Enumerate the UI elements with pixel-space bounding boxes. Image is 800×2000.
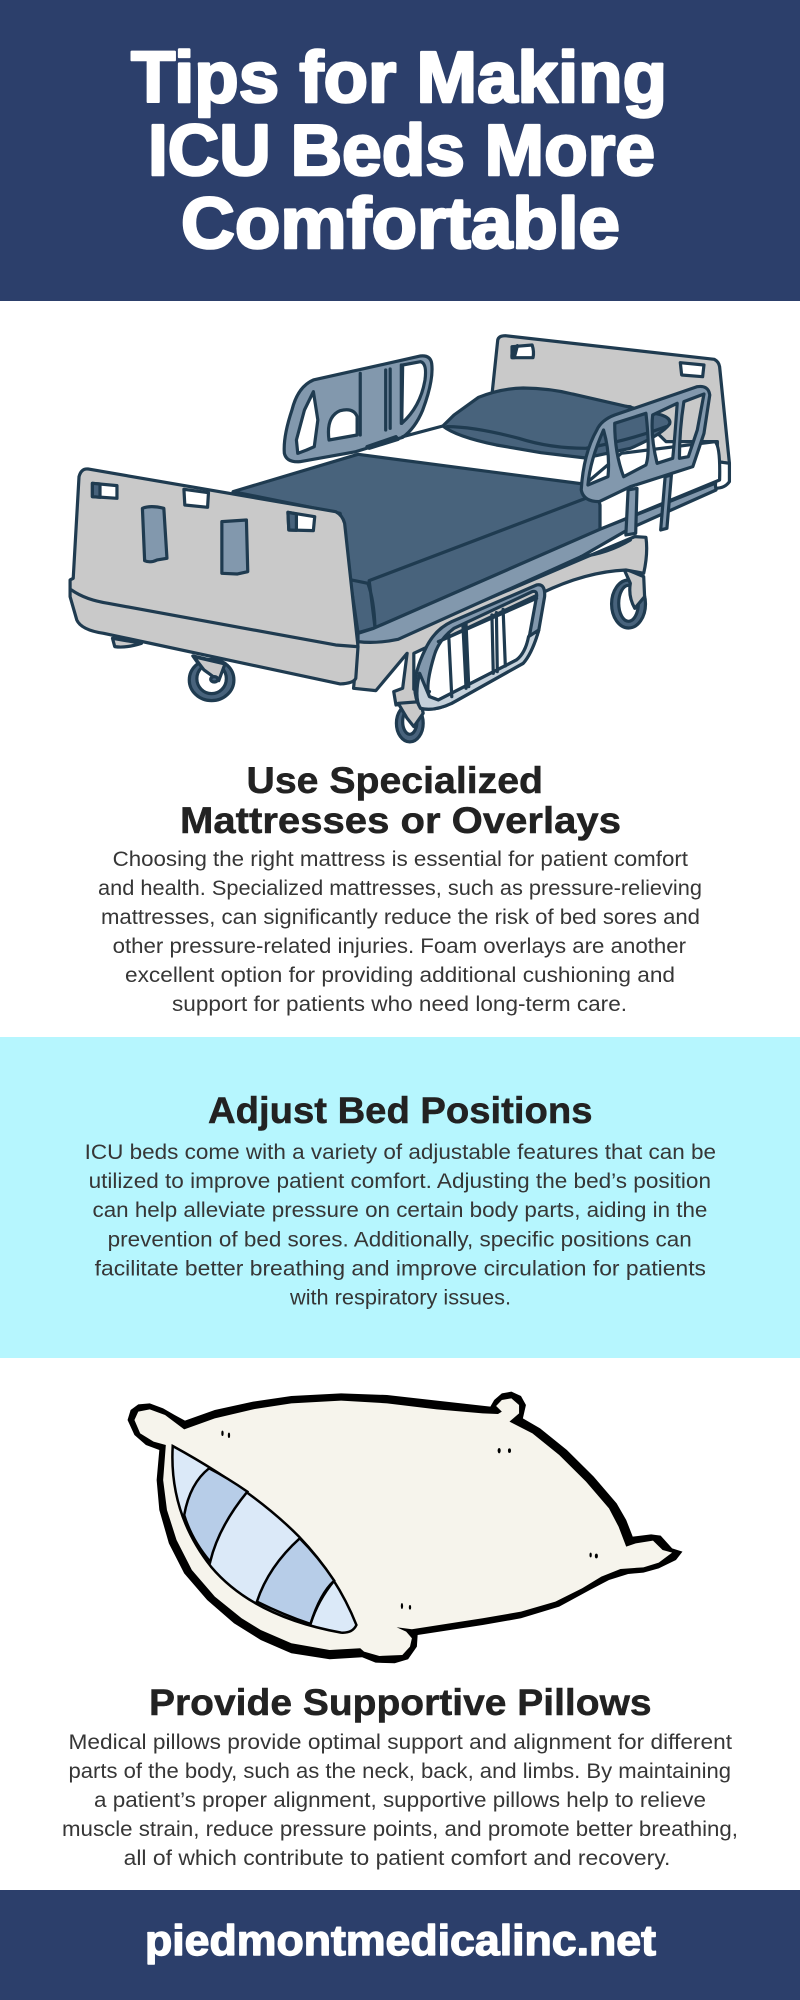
paragraph: supportive pillows: a patient’s proper alignment, supportive pillows help to relieve — [94, 1789, 706, 1812]
heading: mattresses — [180, 760, 621, 841]
icon: front caster — [396, 702, 423, 742]
paragraph: adjust bed positions: ICU beds come with a variety of adjustable features that can be — [85, 1141, 716, 1164]
title: Tips for Making — [131, 38, 667, 118]
paragraph: supportive pillows: muscle strain, reduce pressure points, and promote better breathing, — [62, 1818, 738, 1841]
section text: use specialized mattresses — [98, 760, 702, 1016]
heading: adjust bed positions: Adjust Bed Positions — [208, 1090, 592, 1131]
icon: left caster — [189, 657, 234, 701]
paragraph: adjust bed positions: facilitate better breathing and improve circulation for patients — [95, 1258, 706, 1280]
section text: supportive pillows — [62, 1682, 738, 1870]
panel: adjust bed positions — [0, 1037, 800, 1358]
paragraph: supportive pillows — [62, 1731, 738, 1870]
paragraph: mattresses: and health. Specialized mattresses, such as pressure-relieving — [98, 877, 702, 900]
title: Comfortable — [181, 184, 620, 264]
paragraph: adjust bed positions — [85, 1141, 716, 1310]
icon: headrest pillow — [443, 388, 670, 458]
paragraph: adjust bed positions: utilized to improve patient comfort. Adjusting the bed’s position — [89, 1170, 711, 1193]
paragraph: supportive pillows: parts of the body, such as the neck, back, and limbs. By maintaining — [68, 1760, 731, 1783]
icon: striped pillow — [128, 1392, 682, 1663]
paragraph: mattresses: other pressure-related injuries. Foam overlays are another — [113, 935, 686, 958]
paragraph: supportive pillows: all of which contribute to patient comfort and recovery. — [124, 1847, 670, 1870]
paragraph: mattresses: Choosing the right mattress is essential for patient comfort — [113, 848, 688, 871]
paragraph: adjust bed positions: can help alleviate pressure on certain body parts, aiding in the — [92, 1199, 707, 1222]
footer website url: piedmontmedicalinc.net — [145, 1917, 656, 1965]
paragraph: mattresses: excellent option for providing additional cushioning and — [125, 964, 675, 987]
paragraph: mattresses: support for patients who need long-term care. — [172, 993, 627, 1016]
paragraph: supportive pillows: Medical pillows provide optimal support and alignment for different — [68, 1731, 732, 1754]
paragraph: adjust bed positions: with respiratory issues. — [289, 1286, 511, 1310]
title — [131, 38, 667, 264]
side rail: rear — [581, 386, 710, 535]
panel: header — [0, 0, 800, 301]
mattress — [233, 454, 600, 633]
paragraph: adjust bed positions: prevention of bed sores. Additionally, specific positions can — [108, 1228, 692, 1252]
panel: footer — [0, 1890, 800, 2000]
heading: mattresses: Use Specialized — [246, 760, 543, 801]
side rail: front — [415, 585, 545, 709]
footboard — [70, 469, 358, 684]
title: ICU Beds More — [148, 111, 655, 191]
heading: mattresses: Mattresses or Overlays — [180, 800, 621, 841]
paragraph: mattresses — [98, 848, 702, 1016]
paragraph: mattresses: mattresses, can significantly reduce the risk of bed sores and — [101, 906, 700, 929]
heading: supportive pillows: Provide Supportive Pillows — [149, 1682, 652, 1723]
icon: rear right caster — [612, 568, 645, 628]
icon: hospital bed — [70, 336, 729, 742]
